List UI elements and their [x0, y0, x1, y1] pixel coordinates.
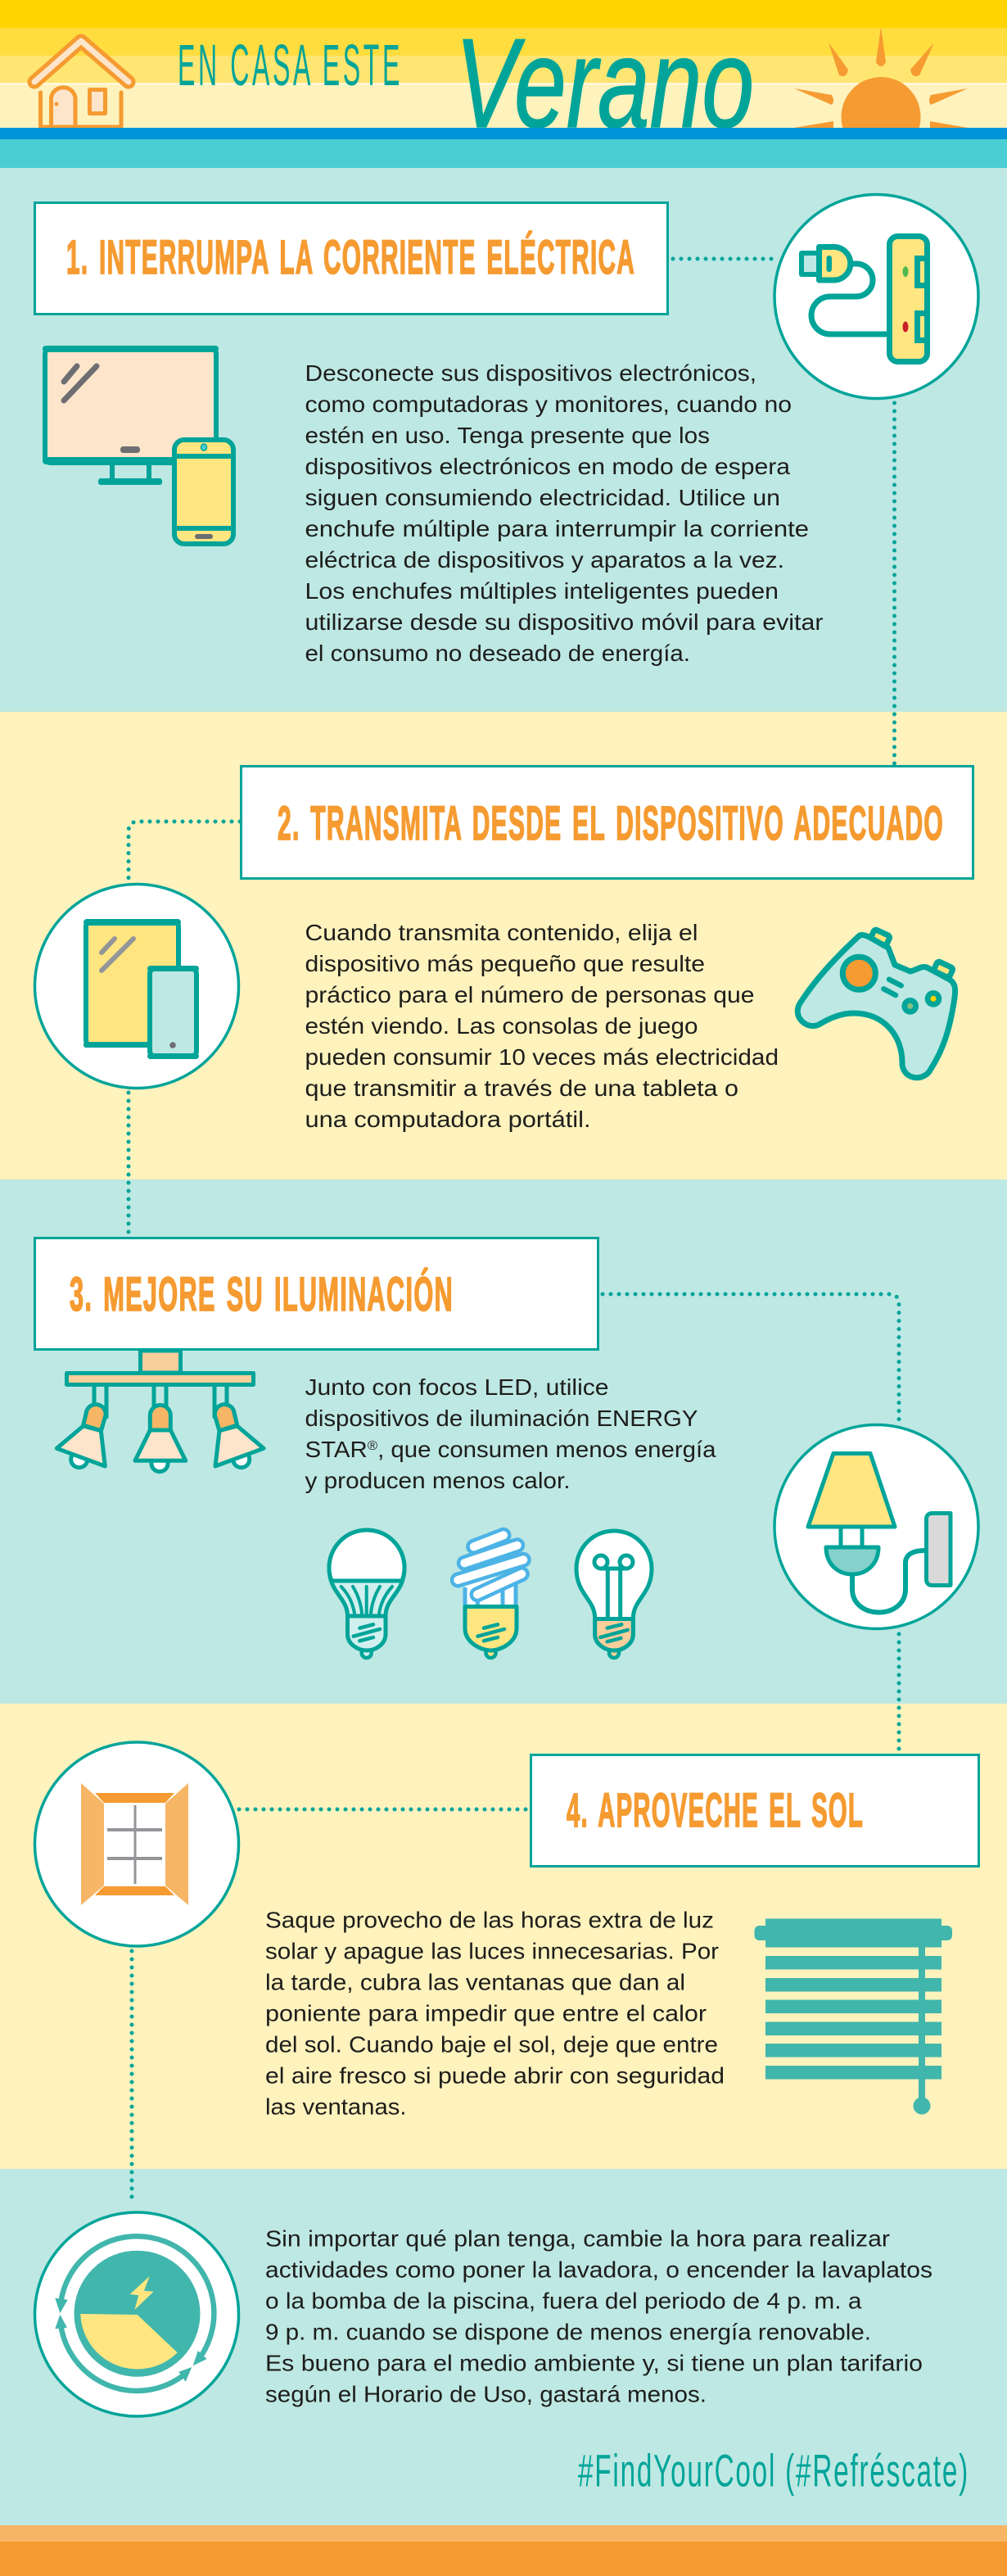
text: section 5 body: según el Horario de Uso, gastará menos. [265, 2382, 707, 2406]
header banner: EN CASA ESTE [178, 34, 403, 98]
text: section 3 body: y producen menos calor. [305, 1468, 570, 1493]
text: section 2 body: Cuando transmita contenido, elija el [305, 920, 698, 945]
text: section 5 body: Sin importar qué plan tenga, cambie la hora para realizar [265, 2226, 890, 2251]
icon: incandescent bulb [576, 1531, 652, 1658]
text: section 3 body: dispositivos de iluminación ENERGY [305, 1406, 698, 1431]
text: section 1 body: dispositivos electrónicos en modo de espera [305, 454, 790, 479]
text: section 2 body: práctico para el número de personas que [305, 982, 755, 1007]
icon: window blinds [755, 1918, 952, 2115]
text: section 4 body: Saque provecho de las horas extra de luz [265, 1907, 714, 1933]
icon: sun [794, 27, 968, 157]
heading box 2 [241, 767, 973, 878]
text: section 3 body [305, 1374, 716, 1493]
text: section 4 body: solar y apague las luces innecesarias. Por [265, 1938, 719, 1964]
icon: monitor and phone [43, 346, 233, 544]
heading box 1 [34, 203, 668, 315]
text: section 2 body: estén viendo. Las consolas de juego [305, 1013, 698, 1039]
footer bands [0, 2525, 1007, 2576]
heading box 3 [34, 1238, 598, 1350]
text: section 4 body: poniente para impedir que entre el calor [265, 2000, 707, 2026]
connector: circle 2 to box 3 [126, 1093, 131, 1235]
text: section 4 body: la tarde, cubra las ventanas que dan al [265, 1969, 685, 1995]
connector: circle 1 to box 2 [892, 403, 896, 765]
icon: time of use clock in circle [34, 2212, 239, 2416]
panel: section 1 [34, 195, 978, 666]
header banner [0, 0, 1007, 168]
text: section 4 body: las ventanas. [265, 2094, 406, 2120]
text: section 1 body: como computadoras y monitores, cuando no [305, 392, 792, 417]
title: verano: Verano [455, 12, 754, 154]
text: section 2 body: una computadora portátil. [305, 1107, 591, 1132]
icon: ceiling spotlights [56, 1351, 264, 1472]
text: section 2 body: dispositivo más pequeño que resulte [305, 951, 705, 976]
panel: section 2 [34, 767, 973, 1132]
text: section 1 body: Desconecte sus dispositivos electrónicos, [305, 360, 756, 386]
connector: circle 4 to circle 5 [129, 1951, 134, 2205]
icon: window in circle [34, 1742, 239, 1946]
text: section 2 body [305, 920, 779, 1132]
panel: section 3 [34, 1238, 978, 1658]
text: section 1 body: el consumo no deseado de energía. [305, 641, 690, 666]
text: section 1 body: Los enchufes múltiples inteligentes pueden [305, 578, 779, 604]
text: section 1 body: utilizarse desde su dispositivo móvil para evitar [305, 609, 823, 635]
connector: box 4 to circle 4 [239, 1807, 530, 1812]
text: section 3 body: Junto con focos LED, utilice [305, 1374, 609, 1400]
text: section 5 body: actividades como poner la lavadora, o encender la lavaplatos [265, 2257, 932, 2282]
text: section 3 body: , que consumen menos energía [377, 1437, 716, 1462]
text: section 5 body: o la bomba de la piscina, fuera del periodo de 4 p. m. a [265, 2289, 862, 2313]
connector: box 2 to circle 2 [129, 822, 240, 882]
text: section 2 body: que transmitir a través de una tableta o [305, 1075, 738, 1101]
heading box 3: 3. MEJORE SU ILUMINACIÓN [70, 1268, 454, 1321]
text: section 4 body: del sol. Cuando baje el sol, deje que entre [265, 2031, 718, 2058]
icon: compact fluorescent bulb [458, 1535, 523, 1658]
text: section 4 body [265, 1907, 725, 2120]
text: section 2 body: pueden consumir 10 veces más electricidad [305, 1044, 779, 1070]
icon: game controller [797, 929, 955, 1078]
text: section 4 body: el aire fresco si puede abrir con seguridad [265, 2062, 725, 2089]
panel: section 4 [34, 1742, 979, 2120]
icon: power strip in circle [774, 195, 978, 398]
icon: wall lamp in circle [774, 1425, 978, 1628]
connector: circle 3 to box 4 [897, 1634, 901, 1753]
heading box 4 [531, 1754, 979, 1866]
text: section 1 body: estén en uso. Tenga presente que los [305, 423, 710, 448]
text: section 5 body: 9 p. m. cuando se dispone de menos energía renovable. [265, 2320, 871, 2344]
icon: house [34, 41, 129, 127]
connector: box 3 to circle 3 [603, 1294, 899, 1425]
text: section 1 body: enchufe múltiple para interrumpir la corriente [305, 516, 809, 541]
connector: box 1 to circle 1 [673, 257, 776, 260]
icon: led bulb [329, 1530, 404, 1658]
panel: section 5 [34, 2212, 969, 2497]
text: section 5 body: Es bueno para el medio ambiente y, si tiene un plan tarifario [265, 2351, 923, 2375]
icon: tablet and phone in circle [34, 885, 239, 1088]
text: section 1 body: siguen consumiendo electricidad. Utilice un [305, 485, 780, 510]
text: section 3 body: ® [368, 1439, 377, 1453]
text: section 5 body [265, 2226, 932, 2406]
text: section 3 body: STAR [305, 1437, 364, 1462]
text: section 1 body [305, 360, 823, 666]
text: section 1 body: eléctrica de dispositivos y aparatos a la vez. [305, 547, 784, 573]
